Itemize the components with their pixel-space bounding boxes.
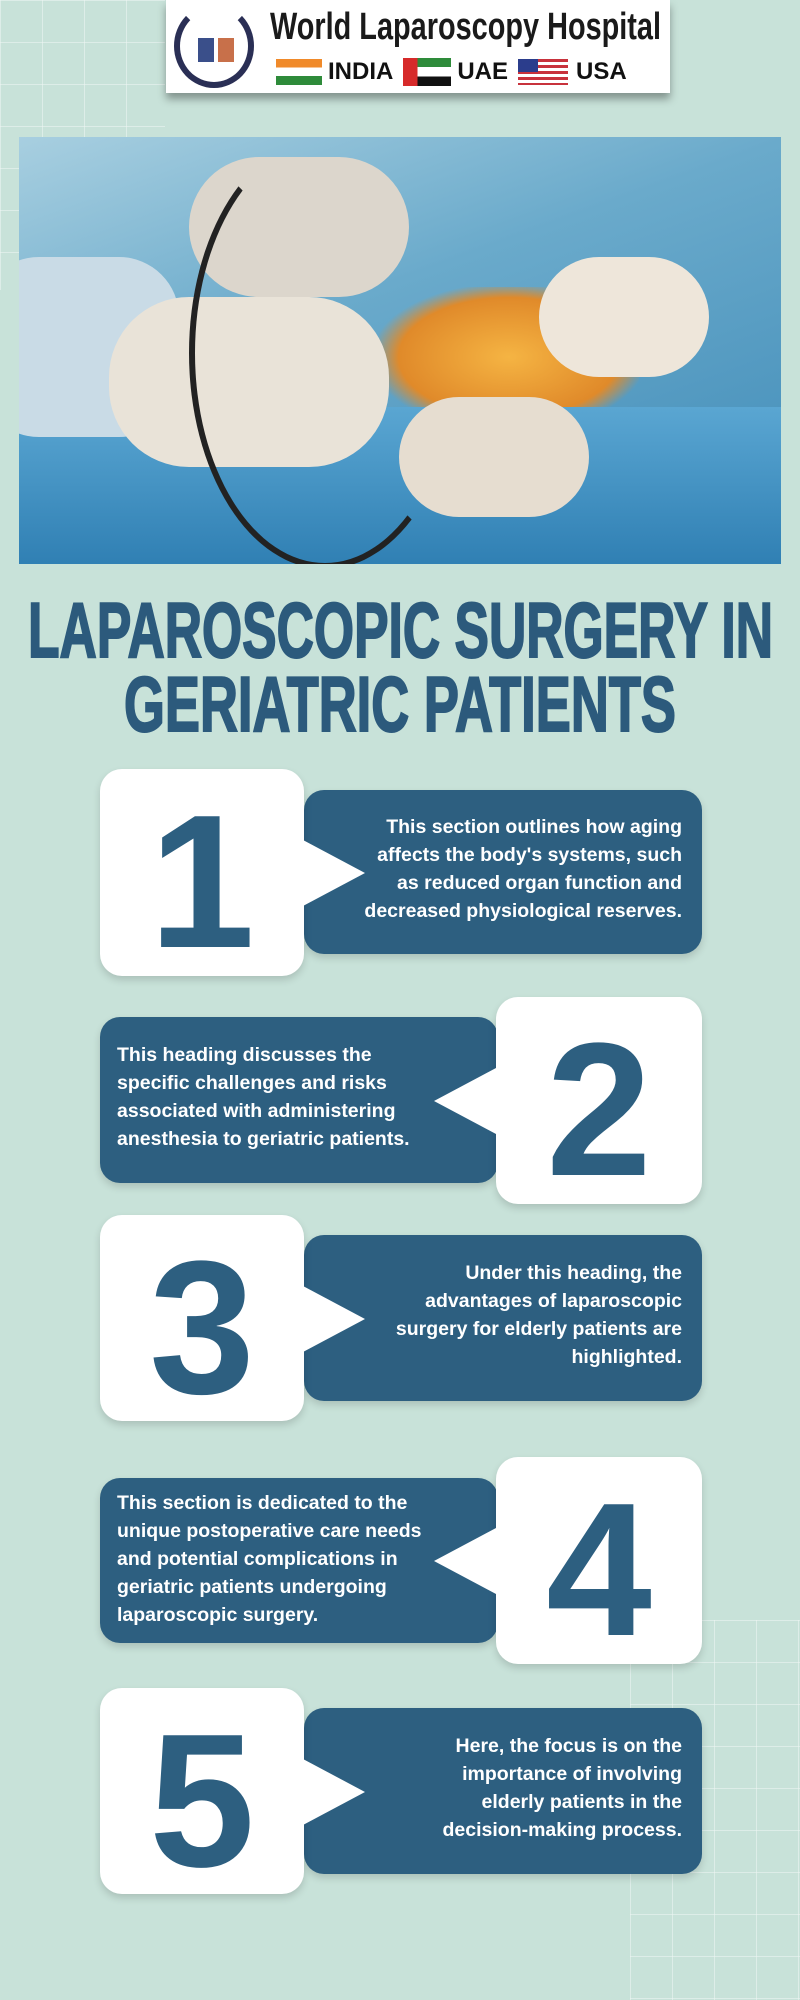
step 1: decreased physiological reserves. <box>364 900 682 922</box>
step 5: 5 <box>149 1695 255 1907</box>
step 3: surgery for elderly patients are <box>396 1318 682 1340</box>
step 2: associated with administering <box>117 1100 395 1122</box>
photo: surgery <box>19 137 781 564</box>
step 1: as reduced organ function and <box>397 872 682 894</box>
step 4: This section is dedicated to the <box>117 1492 407 1514</box>
step 3: Under this heading, the <box>465 1262 682 1284</box>
step 4: laparoscopic surgery. <box>117 1604 318 1626</box>
step 1: affects the body's systems, such <box>377 844 682 866</box>
step 1: 1 <box>149 776 255 988</box>
step 2 <box>98 997 704 1216</box>
step 2: anesthesia to geriatric patients. <box>117 1128 410 1150</box>
step 3: 3 <box>149 1222 255 1434</box>
step 3: highlighted. <box>572 1346 682 1368</box>
step 4 <box>98 1457 705 1676</box>
step 2: This heading discusses the <box>117 1044 372 1066</box>
flags row: INDIA UAE USA <box>328 58 627 85</box>
step 1: This section outlines how aging <box>386 816 682 838</box>
step 1 <box>98 769 704 988</box>
step 5: elderly patients in the <box>482 1791 682 1813</box>
icon: laurel emblem <box>174 4 254 88</box>
step 5: decision-making process. <box>442 1819 682 1841</box>
step 2: 2 <box>546 1004 652 1216</box>
step 5 <box>98 1688 705 1907</box>
step 4: and potential complications in <box>117 1548 398 1570</box>
step 5: Here, the focus is on the <box>456 1735 682 1757</box>
logo text: World Laparoscopy Hospital <box>270 6 661 48</box>
step 2: specific challenges and risks <box>117 1072 387 1094</box>
step 5: importance of involving <box>462 1763 682 1785</box>
step 4: 4 <box>546 1464 652 1676</box>
step 3 <box>98 1215 704 1434</box>
title <box>28 590 773 740</box>
step 3: advantages of laparoscopic <box>425 1290 682 1312</box>
logo header <box>166 0 670 93</box>
step 4: geriatric patients undergoing <box>117 1576 387 1598</box>
step 4: unique postoperative care needs <box>117 1520 422 1542</box>
